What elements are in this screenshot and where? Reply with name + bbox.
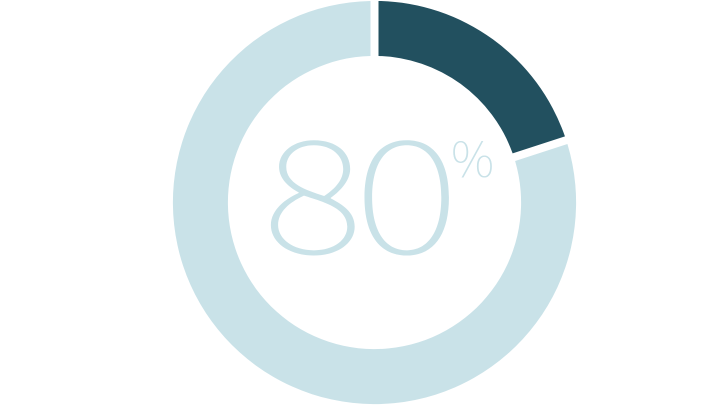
donut segment: 80 percent light (173, 1, 576, 404)
center value: 80 (262, 70, 460, 300)
donut segment: 20 percent dark (378, 1, 565, 153)
percent sign: % (451, 121, 494, 192)
center value: 80: 0 (353, 70, 460, 299)
center value: 80: 8 (262, 72, 364, 300)
